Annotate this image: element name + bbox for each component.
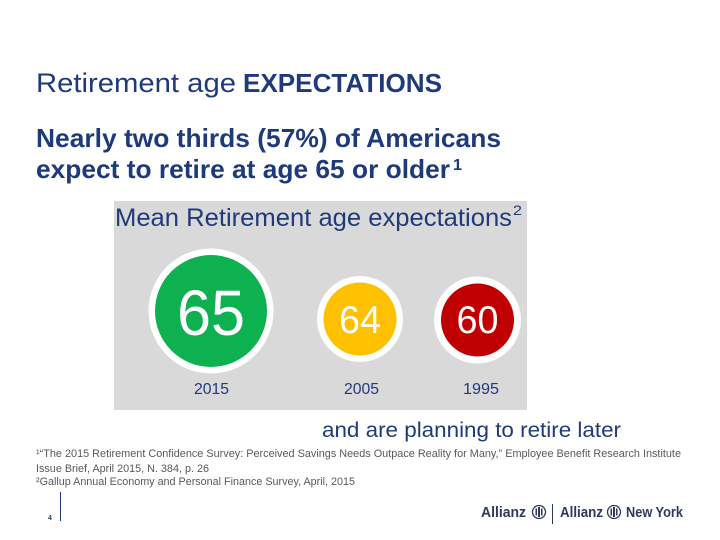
heading: nearly two thirds: 1: [453, 157, 462, 174]
footnotes: ²Gallup Annual Economy and Personal Finance Survey, April, 2015: [36, 476, 355, 488]
panel heading: 2: [513, 202, 522, 218]
circle: 65 in 2015: [148, 248, 274, 374]
heading: nearly two thirds: expect to retire at age 65 or older: [36, 154, 450, 184]
panel: mean retirement age expectations: [114, 201, 527, 410]
panel heading: Mean Retirement age expectations: [115, 204, 512, 232]
year labels: [194, 381, 499, 398]
logo: Allianz and Allianz New York: Allianz: [481, 504, 526, 521]
circle: 65 in 2015: 65: [177, 277, 245, 349]
footnotes: Issue Brief, April 2015, N. 384, p. 26: [36, 463, 209, 475]
year labels: 2005: [344, 381, 379, 398]
icon: Allianz eagle emblem right: [608, 506, 620, 518]
footnotes: ¹“The 2015 Retirement Confidence Survey: Perceived Savings Needs Outpace Reality for Many,” Employee Benefit Research Institute: [36, 448, 681, 460]
title: [36, 68, 442, 98]
year labels: 1995: [463, 381, 499, 398]
icon: Allianz eagle emblem left: [532, 506, 546, 518]
year labels: 2015: [194, 381, 229, 398]
circle: 64 in 2005: 64: [339, 299, 381, 342]
circle: 64 in 2005: [317, 276, 403, 362]
logo: Allianz and Allianz New York: New York: [626, 504, 684, 521]
text: planning to retire later: and are planning to retire later: [322, 419, 621, 442]
circle: 60 in 1995: [434, 276, 521, 364]
circle: 60 in 1995: 60: [456, 299, 498, 342]
title: Retirement age: [36, 68, 236, 98]
page number: 4: [48, 515, 52, 522]
logo: Allianz and Allianz New York: [481, 504, 684, 524]
footnotes: [36, 448, 681, 488]
page number: [48, 492, 60, 522]
logo: Allianz and Allianz New York: Allianz: [560, 504, 603, 521]
title: EXPECTATIONS: [243, 68, 442, 98]
heading: nearly two thirds: Nearly two thirds (57%) of Americans: [36, 123, 501, 153]
heading: nearly two thirds: [36, 123, 501, 184]
